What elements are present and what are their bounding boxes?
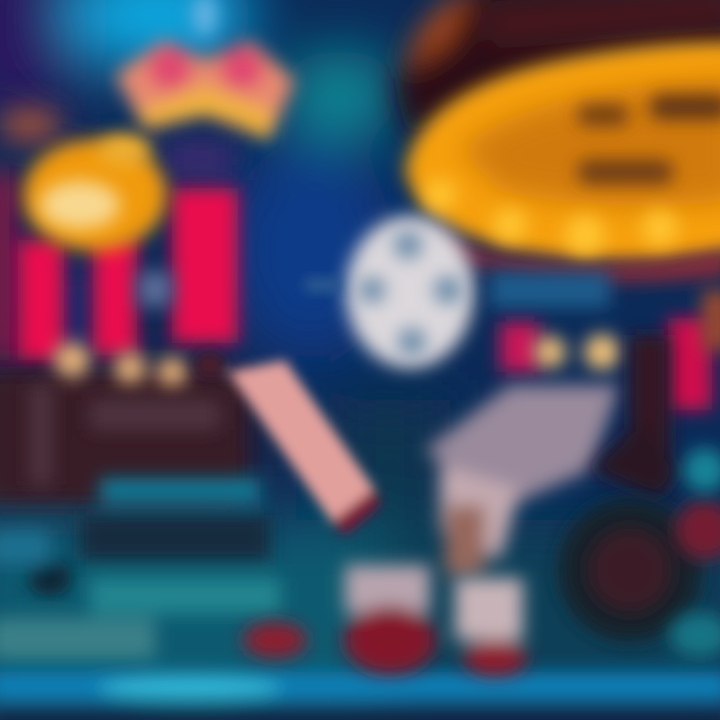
top-right dark canopy <box>395 0 720 140</box>
white cards pile <box>425 385 620 575</box>
golden medallion <box>23 134 167 251</box>
orange ring table <box>405 42 720 282</box>
white film reel <box>305 216 474 368</box>
crown <box>115 0 295 140</box>
left wall arch <box>0 107 235 360</box>
bottom glow strip <box>0 672 720 720</box>
ring lights <box>424 179 678 255</box>
right lights and banners <box>490 272 720 410</box>
teal shelf <box>0 478 280 660</box>
red poker chips <box>243 565 527 676</box>
counter lights and bar <box>0 342 245 500</box>
dark bottle <box>590 335 680 500</box>
dark reels <box>558 448 720 657</box>
red columns <box>18 188 238 360</box>
pink slab <box>195 352 380 535</box>
